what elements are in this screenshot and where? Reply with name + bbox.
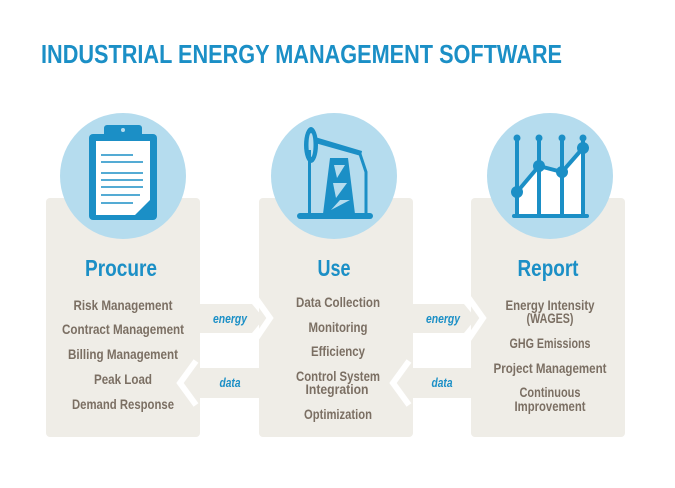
list: procure items: Contract Management	[62, 321, 184, 337]
icon circle: report	[487, 113, 613, 239]
title: INDUSTRIAL ENERGY MANAGEMENT SOFTWARE	[41, 39, 562, 69]
list: report items	[494, 297, 607, 414]
heading: report: Report	[518, 255, 579, 281]
list: procure items: Peak Load	[94, 371, 152, 387]
heading: use: Use	[318, 255, 350, 281]
list: report items: Energy Intensity	[506, 297, 595, 313]
arrow: energy use to report	[413, 297, 483, 340]
arrow: data report to use: data	[432, 375, 452, 390]
list: use items: Data Collection	[296, 294, 380, 310]
list: use items: Control System	[296, 368, 380, 384]
list: report items: GHG Emissions	[510, 335, 591, 351]
panel: report	[471, 113, 625, 437]
panel: procure	[46, 113, 200, 437]
arrow: data use to procure: data	[220, 375, 240, 390]
icon: line chart	[511, 134, 589, 216]
list: report items: (WAGES)	[526, 310, 574, 326]
list: use items: Efficiency	[311, 343, 365, 359]
list: report items: Project Management	[494, 360, 607, 376]
list: use items: Integration	[306, 381, 368, 397]
icon circle: procure	[60, 113, 186, 239]
list: procure items	[62, 297, 184, 412]
icon: clipboard	[89, 125, 157, 220]
heading: procure: Procure	[85, 255, 157, 281]
arrow: energy procure to use: energy	[213, 311, 248, 326]
arrow: energy procure to use	[200, 297, 270, 340]
list: use items	[296, 294, 380, 422]
list: procure items: Risk Management	[74, 297, 173, 313]
arrow: data report to use	[393, 361, 471, 405]
icon: pump jack	[297, 127, 373, 219]
panel: use	[259, 113, 413, 437]
icon circle: use	[271, 113, 397, 239]
list: procure items: Demand Response	[72, 396, 174, 412]
arrow: data use to procure	[180, 361, 259, 405]
list: use items: Monitoring	[308, 319, 368, 335]
arrow: energy use to report: energy	[426, 311, 461, 326]
list: report items: Improvement	[514, 398, 586, 414]
list: use items: Optimization	[304, 406, 372, 422]
list: report items: Continuous	[520, 384, 581, 400]
list: procure items: Billing Management	[68, 346, 178, 362]
